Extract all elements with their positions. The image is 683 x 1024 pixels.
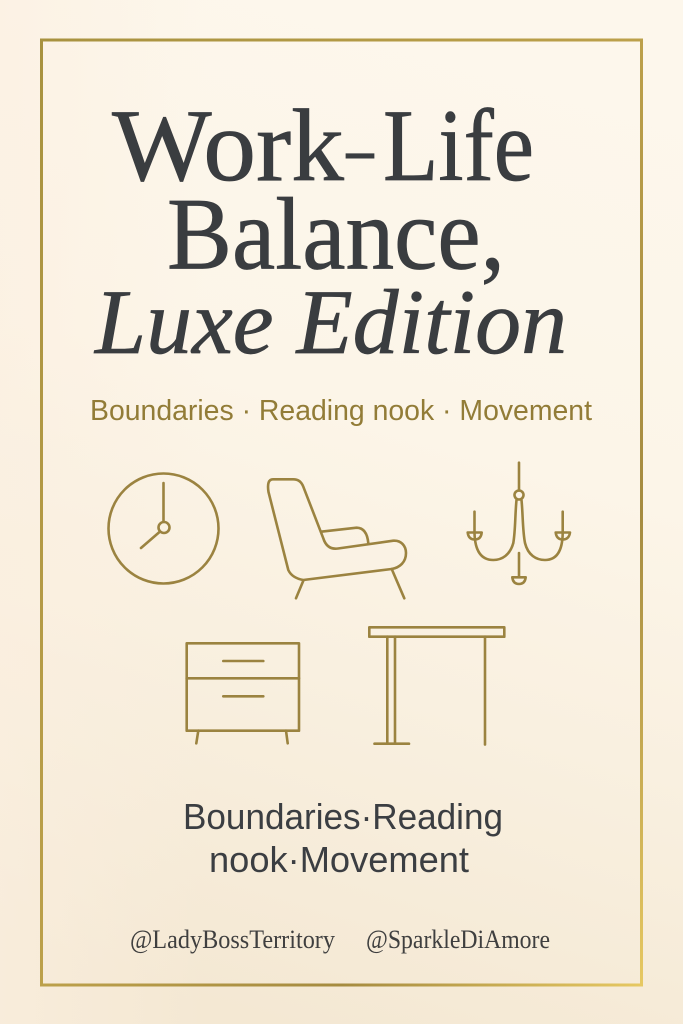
social handles: @LadyBossTerritory xyxy=(130,925,335,954)
icon: armchair xyxy=(268,479,406,598)
icon: clock xyxy=(108,474,218,584)
title: Work xyxy=(112,89,344,203)
title xyxy=(93,89,567,373)
title: Balance, xyxy=(167,178,505,292)
caption: nook·Movement xyxy=(209,839,469,880)
subtitle: Boundaries · Reading nook · Movement xyxy=(90,395,592,427)
caption xyxy=(183,796,503,880)
title: Life xyxy=(383,89,534,203)
icon: desk xyxy=(369,627,504,744)
caption: Boundaries·Reading xyxy=(183,796,503,837)
icon: cabinet xyxy=(187,643,299,743)
social handles: @SparkleDiAmore xyxy=(366,925,550,954)
social handles xyxy=(130,925,550,954)
title: – xyxy=(345,89,375,203)
icon: chandelier xyxy=(468,463,570,584)
title: Luxe Edition xyxy=(93,271,567,373)
